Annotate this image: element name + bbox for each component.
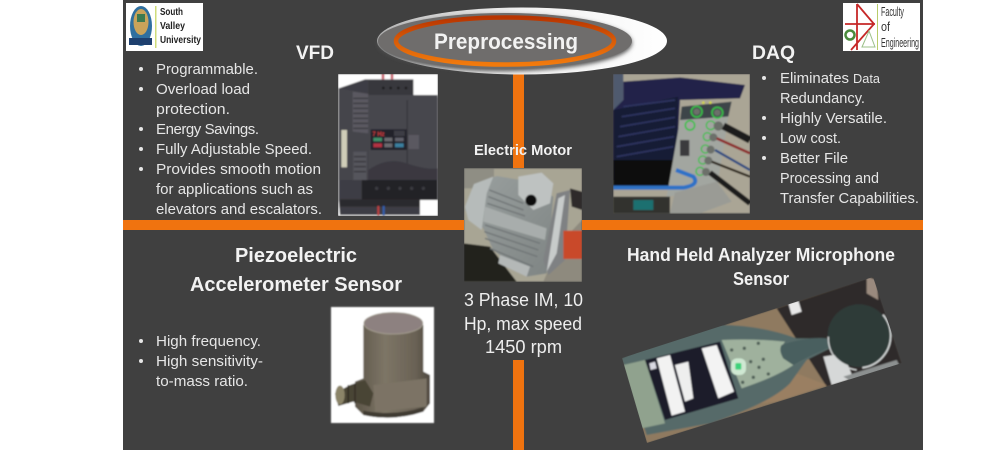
text block: DAQ benefits: Low cost. xyxy=(780,130,841,147)
text block: DAQ benefits: Eliminates xyxy=(780,70,849,87)
text block: DAQ benefits: Transfer Capabilities. xyxy=(780,190,919,207)
image: accelerometer sensor xyxy=(331,307,434,423)
text block: DAQ benefits: Better File xyxy=(780,150,848,167)
text block: VFD benefits: for applications such as xyxy=(156,181,313,198)
text block: VFD benefits: Fully Adjustable Speed. xyxy=(156,141,312,158)
motor specification text xyxy=(464,290,583,357)
logo: South Valley University: Valley xyxy=(160,21,185,32)
text block: DAQ benefits: Redundancy. xyxy=(780,90,865,107)
logo: South Valley University xyxy=(126,3,203,51)
heading: Piezoelectric Accelerometer Sensor: Accelerometer Sensor xyxy=(190,274,402,296)
image: DAQ chassis xyxy=(613,74,750,213)
image: hand held sound analyzer xyxy=(622,277,902,443)
logo: Faculty of Engineering: Engineering xyxy=(881,35,919,50)
logo: South Valley University: University xyxy=(160,35,201,46)
orange connector lines xyxy=(123,74,923,450)
heading: Hand Held Analyzer Microphone Sensor xyxy=(627,245,895,289)
heading: DAQ: DAQ xyxy=(752,43,795,64)
heading: VFD: VFD xyxy=(296,43,334,64)
heading: Piezoelectric Accelerometer Sensor: Piezoelectric xyxy=(235,245,357,267)
motor specification text: 3 Phase IM, 10 xyxy=(464,290,583,310)
text block: VFD benefits: Programmable. xyxy=(156,61,258,78)
text block: accelerometer benefits: High sensitivity- xyxy=(156,353,263,370)
text block: DAQ benefits xyxy=(762,70,919,207)
slide background panel xyxy=(123,0,923,450)
text block: VFD benefits xyxy=(139,61,322,218)
image: VFD drive: 7 Hz xyxy=(372,132,385,138)
logo: Faculty of Engineering: Faculty xyxy=(881,4,904,19)
text block: VFD benefits: Provides smooth motion xyxy=(156,161,321,178)
text block: VFD benefits: Energy Savings. xyxy=(156,121,259,138)
heading: Hand Held Analyzer Microphone Sensor: Sensor xyxy=(733,269,789,289)
logo: Faculty of Engineering xyxy=(843,3,920,51)
heading: Hand Held Analyzer Microphone Sensor: Hand Held Analyzer Microphone xyxy=(627,245,895,265)
text block: accelerometer benefits xyxy=(139,333,263,390)
text block: VFD benefits: protection. xyxy=(156,101,230,118)
text block: DAQ benefits: Processing and xyxy=(780,170,879,187)
title badge: Preprocessing xyxy=(377,8,667,74)
image: electric motor xyxy=(464,168,582,282)
motor specification text: Hp, max speed xyxy=(464,314,582,334)
text block: DAQ benefits: Data xyxy=(853,71,881,86)
text block: VFD benefits: Overload load xyxy=(156,81,250,98)
image: VFD drive xyxy=(338,74,438,216)
label: Electric Motor: Electric Motor xyxy=(474,143,572,159)
motor specification text: 1450 rpm xyxy=(485,337,562,357)
text block: VFD benefits: elevators and escalators. xyxy=(156,201,322,218)
logo: South Valley University: South xyxy=(160,7,183,18)
heading: Piezoelectric Accelerometer Sensor xyxy=(190,245,402,296)
text block: DAQ benefits: Highly Versatile. xyxy=(780,110,887,127)
text block: accelerometer benefits: to-mass ratio. xyxy=(156,373,248,390)
title badge: Preprocessing: Preprocessing xyxy=(434,29,578,54)
logo: Faculty of Engineering: of xyxy=(881,19,890,34)
text block: accelerometer benefits: High frequency. xyxy=(156,333,261,350)
